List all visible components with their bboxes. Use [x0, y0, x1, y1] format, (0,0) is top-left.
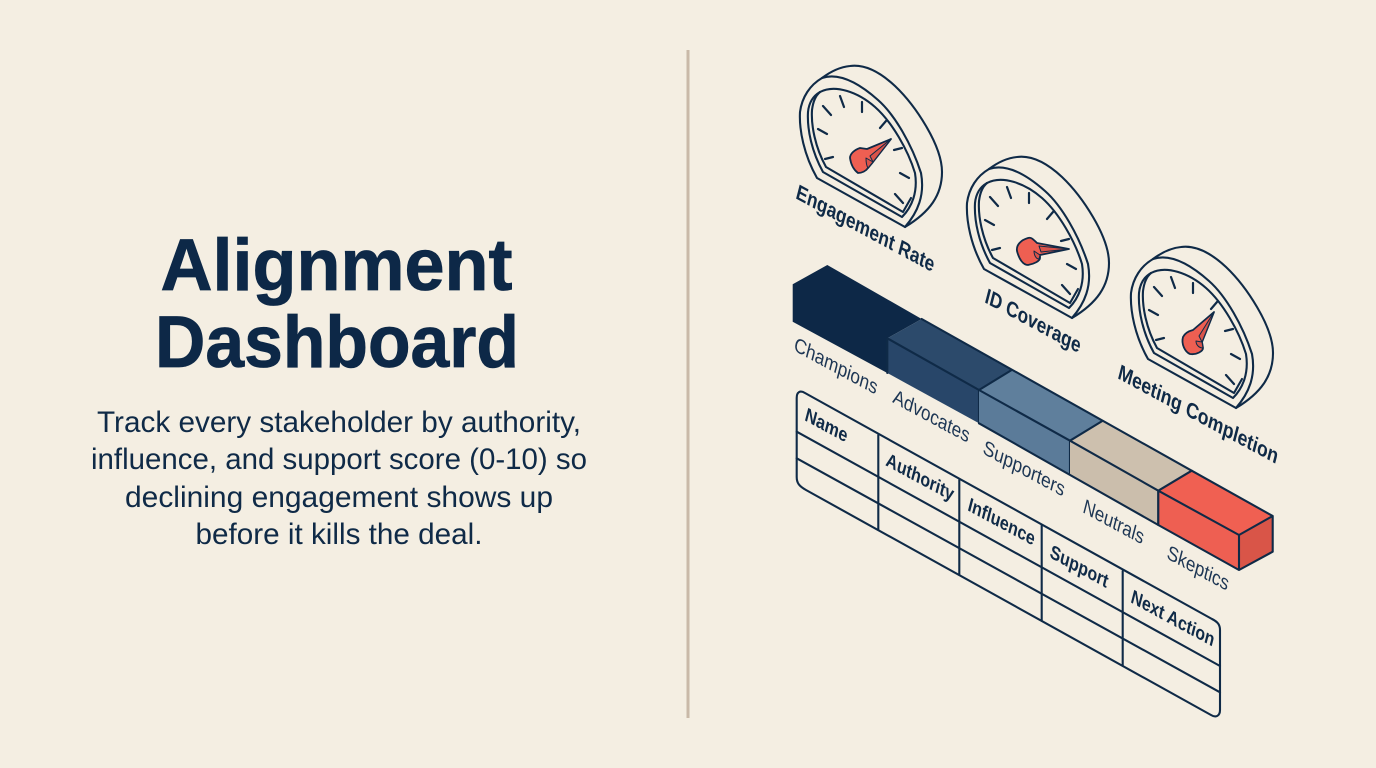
bar label: Advocates: Advocates — [891, 385, 972, 448]
stacked isometric bar — [793, 265, 1273, 570]
bar label: Neutrals: Neutrals — [1081, 495, 1146, 549]
description text: Track every stakeholder by authority, — [97, 406, 581, 439]
stakeholder table — [797, 392, 1220, 716]
needle — [850, 139, 891, 173]
description text: declining engagement shows up — [125, 481, 553, 514]
needle — [1017, 238, 1069, 265]
table columns — [878, 435, 1123, 666]
description text — [91, 406, 587, 551]
bar label: Skeptics: Skeptics — [1165, 541, 1231, 596]
bar label: Champions: Champions — [792, 333, 880, 400]
segment: Advocates — [887, 319, 1012, 423]
gauge label: Meeting Completion: Meeting Completion — [1116, 360, 1281, 469]
table outline — [797, 392, 1220, 716]
gauge: Engagement Rate — [800, 66, 942, 227]
table header: Authority: Authority — [884, 449, 956, 506]
segment: Skeptics — [1158, 471, 1273, 570]
description text: before it kills the deal. — [196, 518, 482, 551]
needle — [1182, 312, 1214, 354]
vertical divider — [686, 50, 690, 718]
gauge: Meeting Completion — [1131, 247, 1273, 408]
description text: influence, and support score (0-10) so — [91, 443, 587, 476]
title: Dashboard — [155, 302, 519, 383]
table header: Name: Name — [803, 404, 850, 447]
top back edge — [922, 319, 1192, 471]
bottom front edge — [979, 423, 1158, 525]
table rows — [797, 432, 1220, 692]
title — [155, 225, 519, 383]
gauge label: ID Coverage: ID Coverage — [983, 284, 1083, 358]
gauge: ID Coverage — [967, 157, 1109, 318]
title: Alignment — [160, 225, 512, 306]
segment: Supporters — [979, 370, 1102, 474]
segment: Champions — [793, 265, 922, 373]
segment: Neutrals — [1070, 421, 1192, 525]
gauge label: Engagement Rate: Engagement Rate — [794, 180, 937, 277]
table header: Influence: Influence — [966, 494, 1037, 551]
table header: Support: Support — [1048, 541, 1111, 593]
bar label: Supporters: Supporters — [981, 436, 1067, 502]
table header: Next Action: Next Action — [1129, 586, 1217, 652]
